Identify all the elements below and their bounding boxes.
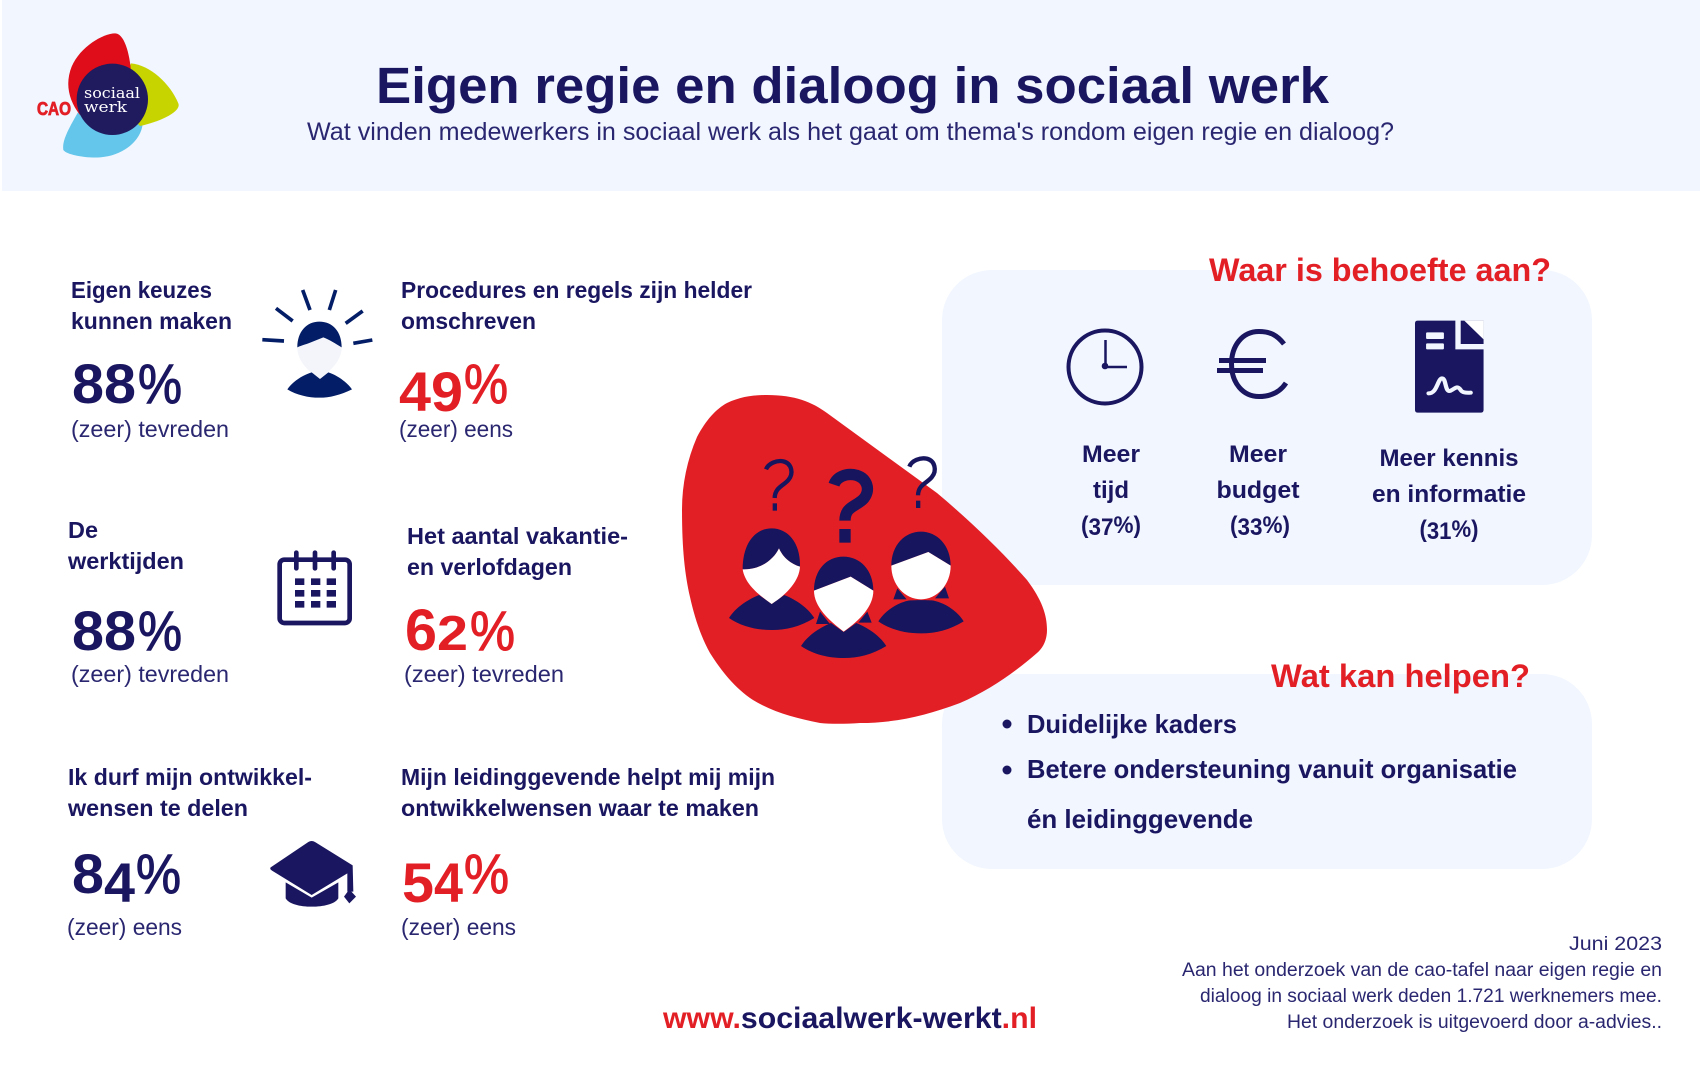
stat: procedures en regels: Procedures en regels zijn helder	[401, 277, 752, 303]
stat: eigen keuzes: %	[138, 352, 182, 415]
stat: ontwikkelwensen delen: 4	[104, 851, 135, 914]
list: betere ondersteuning: Betere ondersteuning vanuit organisatie	[1027, 754, 1517, 784]
stat: leidinggevende helpt: %	[464, 842, 509, 905]
text: meer budget: budget	[1216, 477, 1300, 504]
icon: graduation cap	[270, 841, 356, 907]
stat: leidinggevende helpt: 5	[402, 851, 434, 914]
text: meer tijd: 37	[1088, 514, 1114, 541]
text: meer budget: Meer	[1229, 441, 1287, 468]
title: Eigen regie en dialoog in sociaal werk	[376, 57, 1330, 114]
text: meer kennis en informatie: %)	[1451, 516, 1478, 543]
stat: de werktijden	[67, 517, 229, 687]
stat: ontwikkelwensen delen	[67, 764, 312, 940]
text: meer budget: (	[1230, 512, 1238, 539]
stat: vakantie en verlofdagen: (zeer) tevreden	[404, 661, 564, 687]
stat: procedures en regels: (zeer) eens	[399, 416, 513, 442]
panel: wat kan helpen	[942, 658, 1592, 869]
text: meer kennis en informatie: (	[1420, 516, 1428, 543]
website url: www.sociaalwerk-werkt.nl	[662, 1002, 1037, 1035]
logo: cao sociaal werk	[37, 33, 179, 158]
stat: de werktijden: De	[68, 517, 98, 543]
stat: vakantie en verlofdagen: 2	[437, 607, 468, 661]
icon: calendar	[280, 553, 350, 623]
icon: three people with question marks	[729, 458, 964, 658]
text: meer tijd	[1081, 441, 1141, 541]
logo: cao sociaal werk: CAO	[37, 99, 71, 119]
stat: ontwikkelwensen delen: Ik durf mijn ontwikkel-	[68, 764, 312, 790]
note: date and source: Het onderzoek is uitgevoerd door a-advies..	[1287, 1012, 1662, 1033]
text: meer budget	[1216, 441, 1300, 541]
list: duidelijke kaders: Duidelijke kaders	[1027, 709, 1237, 739]
text: meer budget: %)	[1263, 512, 1290, 539]
text: meer tijd: %)	[1114, 512, 1141, 539]
stat: de werktijden: werktijden	[67, 548, 184, 574]
text: meer budget: 33	[1237, 514, 1263, 541]
heading: wat kan helpen: Wat kan helpen?	[1271, 658, 1530, 694]
panel: waar is behoefte aan	[942, 252, 1592, 585]
stat: vakantie en verlofdagen: %	[470, 599, 515, 662]
stat: de werktijden: %	[138, 599, 182, 662]
text: meer tijd: Meer	[1082, 441, 1140, 468]
note: date and source: Juni 2023	[1569, 934, 1662, 955]
stat: leidinggevende helpt: 4	[434, 851, 463, 914]
stat: vakantie en verlofdagen: Het aantal vakantie-	[407, 523, 628, 549]
stat: eigen keuzes: Eigen keuzes	[71, 277, 212, 303]
stat: leidinggevende helpt: (zeer) eens	[401, 914, 516, 940]
subtitle: Wat vinden medewerkers in sociaal werk als het gaat om thema's rondom eigen regie en dialoog?	[307, 118, 1394, 146]
stat: eigen keuzes: (zeer) tevreden	[71, 416, 229, 442]
stat: de werktijden: (zeer) tevreden	[71, 661, 229, 687]
text: meer kennis en informatie	[1372, 445, 1526, 545]
note: date and source	[1182, 934, 1662, 1033]
stat: procedures en regels	[399, 277, 752, 442]
stat: procedures en regels: %	[464, 352, 508, 415]
stat: leidinggevende helpt	[401, 764, 775, 940]
logo: cao sociaal werk: sociaal	[84, 84, 140, 102]
stat: leidinggevende helpt: ontwikkelwensen waar te maken	[401, 795, 759, 821]
icon: euro	[1217, 332, 1286, 396]
text: meer kennis en informatie: en informatie	[1372, 481, 1526, 508]
stat: eigen keuzes	[71, 277, 232, 442]
note: date and source: Aan het onderzoek van de cao-tafel naar eigen regie en	[1182, 960, 1662, 981]
stat: vakantie en verlofdagen	[404, 523, 628, 687]
header band	[2, 0, 1700, 191]
stat: procedures en regels: 49	[399, 360, 463, 423]
central red blob with people	[682, 395, 1047, 724]
heading: waar is behoefte aan: Waar is behoefte aan?	[1209, 252, 1551, 288]
stat: ontwikkelwensen delen: (zeer) eens	[67, 914, 182, 940]
text: meer tijd: tijd	[1093, 477, 1129, 504]
stat: eigen keuzes: 88	[72, 352, 136, 415]
icon: clock	[1068, 330, 1142, 404]
text: meer tijd: (	[1081, 512, 1089, 539]
stat: procedures en regels: omschreven	[401, 308, 536, 334]
list: betere ondersteuning: én leidinggevende	[1027, 804, 1253, 834]
text: meer kennis en informatie: Meer kennis	[1380, 445, 1518, 472]
logo: cao sociaal werk: werk	[84, 98, 128, 116]
stat: vakantie en verlofdagen: en verlofdagen	[407, 554, 572, 580]
icon: document	[1415, 321, 1484, 413]
stat: ontwikkelwensen delen: wensen te delen	[67, 795, 248, 821]
stat: ontwikkelwensen delen: 8	[72, 842, 104, 905]
icon: person with idea rays	[262, 290, 372, 398]
text: meer kennis en informatie: 31	[1427, 518, 1451, 545]
note: date and source: dialoog in sociaal werk deden 1.721 werknemers mee.	[1200, 986, 1662, 1007]
stat: ontwikkelwensen delen: %	[136, 842, 181, 905]
list: betere ondersteuning	[1002, 754, 1517, 834]
stat: eigen keuzes: kunnen maken	[71, 308, 232, 334]
stat: de werktijden: 88	[72, 599, 136, 662]
stat: leidinggevende helpt: Mijn leidinggevende helpt mij mijn	[401, 764, 775, 790]
stat: vakantie en verlofdagen: 6	[405, 598, 437, 663]
